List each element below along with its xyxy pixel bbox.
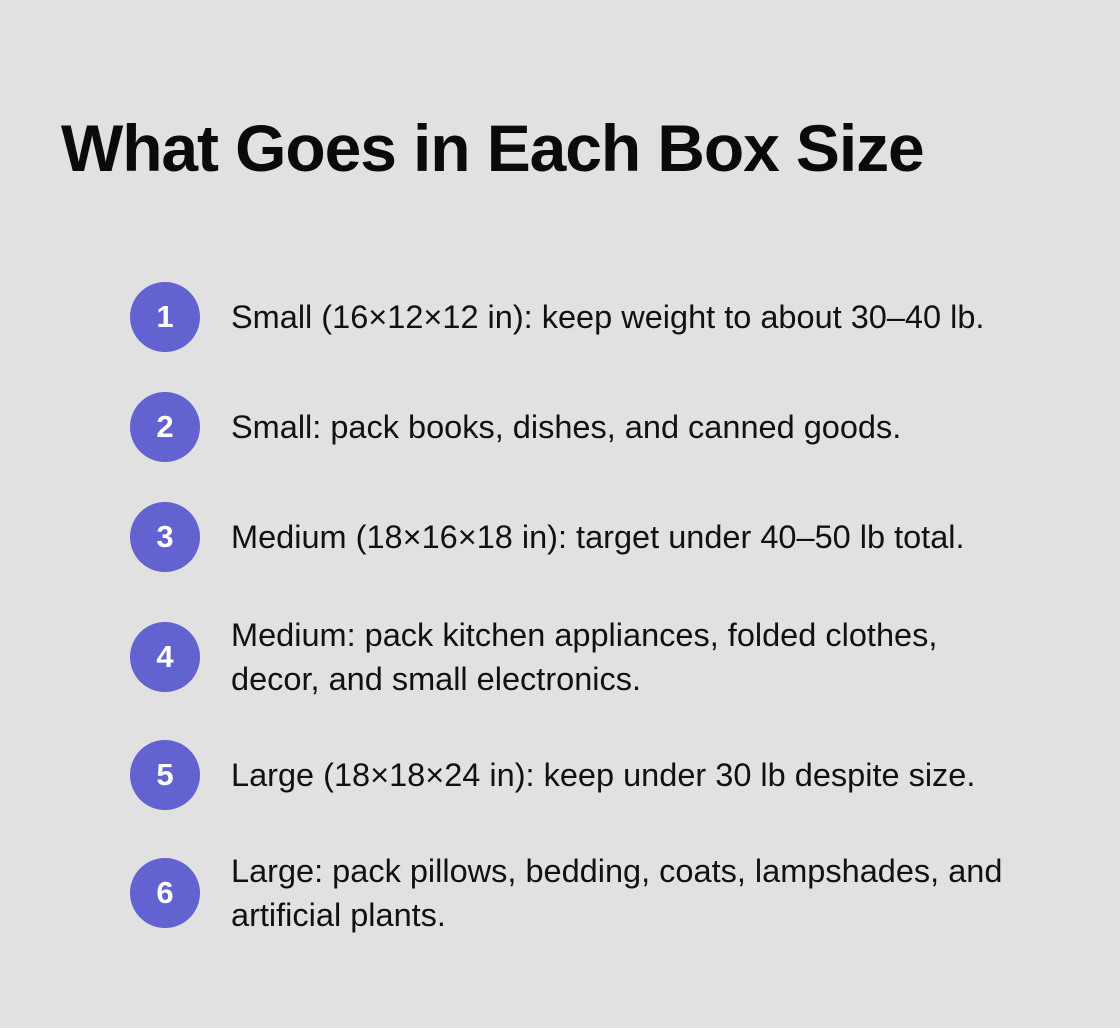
item 6 [130, 853, 1002, 933]
text 4: Medium: pack kitchen appliances, folded clothes, [231, 617, 937, 653]
icon: number 1 [130, 282, 200, 352]
icon: number 3 [130, 502, 200, 572]
text 6: artificial plants. [231, 897, 446, 933]
icon: number 6: 6 [156, 875, 174, 910]
item 4 [130, 617, 937, 697]
text 1: Small (16×12×12 in): keep weight to about 30–40 lb. [231, 299, 984, 335]
icon: number 3: 3 [156, 519, 174, 554]
text 6: Large: pack pillows, bedding, coats, lampshades, and [231, 853, 1002, 889]
icon: number 6 [130, 858, 200, 928]
text 2: Small: pack books, dishes, and canned goods. [231, 409, 901, 445]
text 4: decor, and small electronics. [231, 661, 641, 697]
text 3: Medium (18×16×18 in): target under 40–50 lb total. [231, 519, 965, 555]
icon: number 4 [130, 622, 200, 692]
item 5 [130, 740, 975, 810]
text 4 [231, 617, 937, 697]
item 3 [130, 502, 965, 572]
icon: number 5 [130, 740, 200, 810]
icon: number 2: 2 [156, 409, 174, 444]
text 5: Large (18×18×24 in): keep under 30 lb despite size. [231, 757, 975, 793]
icon: number 5: 5 [156, 757, 174, 792]
title: What Goes in Each Box Size [61, 111, 924, 185]
icon: number 1: 1 [156, 299, 174, 334]
item 2 [130, 392, 901, 462]
icon: number 2 [130, 392, 200, 462]
text 6 [231, 853, 1002, 933]
item 1 [130, 282, 984, 352]
icon: number 4: 4 [156, 639, 174, 674]
